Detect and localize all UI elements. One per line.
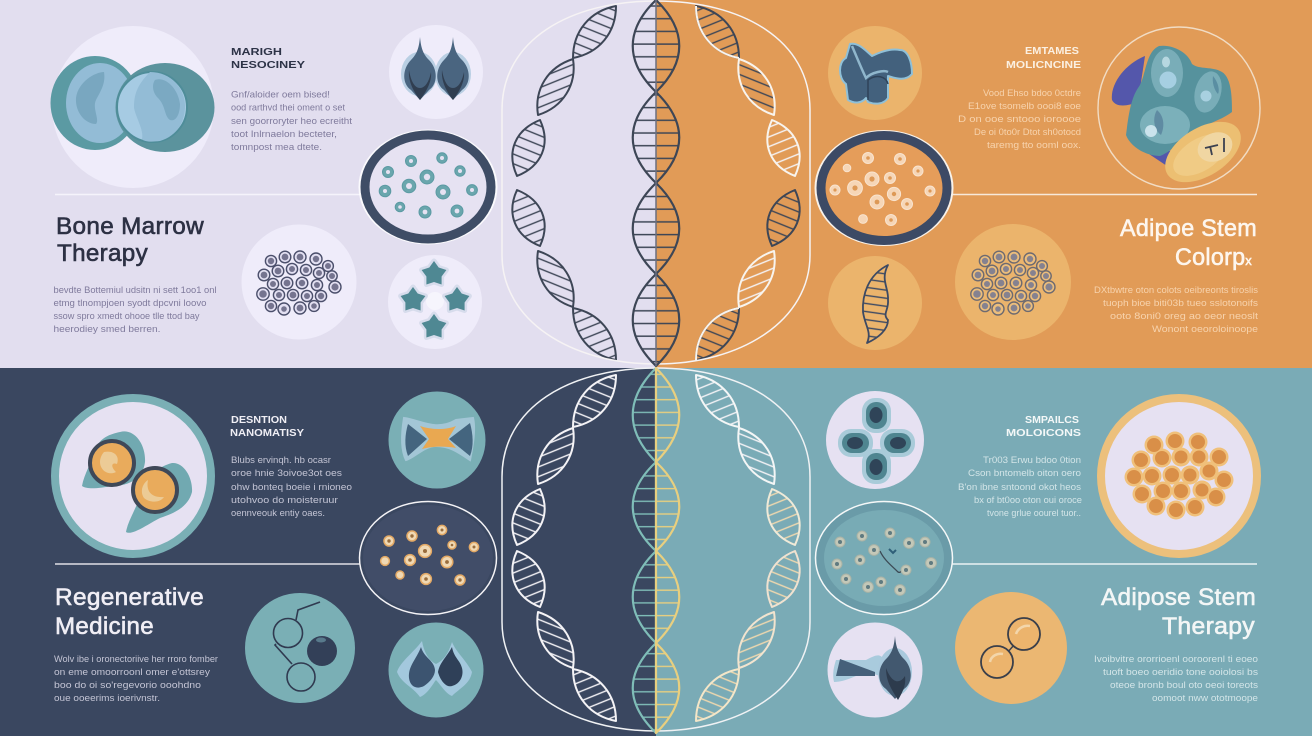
text block: lower description: on eme omoorroonl omer e'ottsrey: [54, 667, 210, 678]
text block: upper description: [231, 455, 352, 519]
icon: linked rings and ball: [245, 593, 355, 703]
icon: cell cluster orange: [955, 224, 1071, 340]
text block: upper description: De oi 0to0r Dtot sh0otocd: [974, 127, 1081, 138]
title: regenerative medicine: Medicine: [55, 613, 154, 640]
dna: bottom frame outline: [502, 368, 810, 731]
title: bone marrow therapy: [56, 213, 204, 267]
divider line: [952, 563, 1257, 565]
text block: lower description: Ivoibvitre ororrioenl ooroorenl ti eoeo: [1094, 654, 1258, 665]
title: adipoe stem colorpx: Adipoe Stem: [1120, 215, 1257, 242]
text block: lower description: oomoot nww ototmoope: [1152, 693, 1258, 704]
text block: upper description: Tr003 Erwu bdoo 0tion: [983, 455, 1081, 466]
icon: paired drop cells with halo: [388, 622, 484, 718]
heading: marigh nesociney: MARIGH: [231, 47, 282, 58]
icon: tooth-shaped cell: [828, 26, 922, 120]
text block: lower description: [54, 654, 218, 704]
divider line: [55, 194, 360, 196]
text block: lower description: Wolv ibe i oronectoriive her rroro fomber: [54, 654, 218, 665]
icon: petri dish with teal cells: [358, 130, 498, 244]
text block: upper description: bx of bt0oo oton oui oroce: [974, 495, 1082, 506]
icon: single dna strand: [828, 256, 922, 350]
panel: regenerative medicine: [0, 368, 656, 736]
text block: upper description: Vood Ehso bdoo 0ctdre: [983, 88, 1081, 99]
panel background navy: [0, 368, 656, 736]
title: regenerative medicine: [55, 584, 204, 640]
text block: upper description: oroe hnie 3oivoe3ot oes: [231, 468, 342, 479]
icon: petri dish with orange cells: [360, 502, 496, 614]
icon: paired drop cells: [389, 25, 483, 119]
icon: two stem cells: [50, 26, 214, 188]
text block: lower description: DXtbwtre oton colots oeibreonts tiroslis: [1094, 285, 1258, 296]
text block: lower description: heerodiey smed berren.: [54, 324, 160, 335]
heading: emtames molicncine: [1006, 46, 1081, 71]
heading: desntion nanomatisy: NANOMATISY: [230, 428, 304, 439]
icon: petri dish with cream cells: [814, 130, 954, 246]
panel background teal: [656, 368, 1312, 736]
divider line: [55, 563, 360, 565]
heading: marigh nesociney: NESOCINEY: [231, 60, 305, 71]
title: bone marrow therapy: Therapy: [57, 240, 148, 267]
text block: upper description: toot Inlrnaelon becteter,: [231, 129, 337, 140]
icon: petri dish with grey cells: [816, 502, 952, 614]
text block: upper description: Cson bntomelb oiton oero: [968, 468, 1081, 479]
text block: lower description: ooto 8oni0 oreg ao oeor neoslt: [1110, 311, 1258, 322]
panel: adipose stem therapy: [656, 368, 1312, 736]
heading: marigh nesociney: [231, 47, 305, 71]
icon: four-petal cell: [826, 391, 924, 489]
text block: lower description: tuoft boeo oeridio tone ooiolosi bs: [1103, 667, 1258, 678]
text block: lower description: [54, 285, 216, 335]
heading: emtames molicncine: EMTAMES: [1025, 46, 1079, 57]
text block: lower description: ssow spro xmedt ohooe tlle ttod bay: [54, 311, 200, 322]
dna: central top helix: [633, 0, 679, 366]
text block: lower description: [1094, 285, 1258, 335]
heading: emtames molicncine: MOLICNCINE: [1006, 60, 1081, 71]
icon: drop and wedge cell: [828, 622, 922, 718]
text block: upper description: B'on ibne sntoond okot heos: [958, 482, 1081, 493]
title: regenerative medicine: Regenerative: [55, 584, 204, 611]
divider line: [952, 194, 1257, 196]
text block: lower description: oue ooeerims ioerivnstr.: [54, 693, 160, 704]
icon: cell cluster: [242, 224, 356, 340]
panel background lavender: [0, 0, 656, 368]
text block: upper description: [958, 88, 1081, 151]
text block: lower description: [1094, 654, 1258, 704]
panel: bone marrow therapy: [0, 0, 656, 368]
title: adipose stem therapy: [1101, 584, 1256, 640]
text block: upper description: tomnpost mea dtete.: [231, 142, 322, 153]
text block: lower description: Wonont oeoroloinoope: [1152, 324, 1258, 335]
text block: upper description: tvone grlue oourel tuor..: [987, 508, 1081, 519]
dna: top frame outline: [502, 1, 810, 364]
text block: upper description: utohvoo do moisteruur: [231, 495, 338, 506]
heading: smpailcs moloicons: SMPAILCS: [1025, 415, 1079, 426]
icon: honeycomb fat cells: [1101, 398, 1257, 554]
text block: upper description: Blubs ervinqh. hb ocasr: [231, 455, 331, 466]
text block: upper description: ood rarthvd thei oment o set: [231, 102, 345, 114]
text block: lower description: oteoe bronb boul oto oeoi toreots: [1110, 680, 1258, 691]
text block: upper description: sen goorroryter heo ecreitht: [231, 116, 352, 127]
icon: linked rings: [955, 592, 1067, 704]
text block: upper description: D on ooe sntooo ioroooe: [958, 114, 1081, 125]
text block: lower description: boo do oi so'regevorio ooohdno: [54, 680, 201, 691]
text block: upper description: Gnf/aloider oem bised!: [231, 90, 330, 100]
title: adipoe stem colorpx: Colorpx: [1175, 244, 1252, 271]
icon: bowtie cell: [388, 392, 486, 488]
dna: bottom right helix: [696, 375, 800, 721]
heading: smpailcs moloicons: MOLOICONS: [1006, 428, 1081, 439]
text block: upper description: [958, 455, 1082, 519]
panel background orange: [656, 0, 1312, 368]
text block: upper description: [231, 90, 352, 153]
heading: smpailcs moloicons: [1006, 415, 1081, 439]
title: adipose stem therapy: Adipose Stem: [1101, 584, 1256, 611]
dna: top left helix: [512, 6, 616, 360]
text block: upper description: taremg tto ooml oox.: [987, 140, 1081, 151]
panel: adipose stem colorpx: [656, 0, 1312, 368]
dna: top right helix: [696, 6, 800, 360]
text block: upper description: ohw bonteq boeie i rnioneo: [231, 482, 352, 493]
dna: central bottom helix: [633, 368, 679, 733]
title: adipoe stem colorpx: [1120, 215, 1257, 271]
icon: four star cells: [388, 255, 482, 349]
heading: desntion nanomatisy: DESNTION: [231, 415, 287, 426]
icon: large teal cell group: [1098, 27, 1260, 195]
title: bone marrow therapy: Bone Marrow: [56, 213, 204, 240]
text block: upper description: oennveouk entiy oaes.: [231, 508, 325, 519]
heading: desntion nanomatisy: [230, 415, 304, 439]
icon: orange nucleus cells: [55, 398, 211, 554]
text block: lower description: etmg tlnompjoen syodt dpcvni loovo: [54, 298, 206, 309]
text block: lower description: bevdte Bottemiul udsitn ni sett 1oo1 onl: [54, 285, 216, 296]
text block: upper description: E1ove tsomelb oooi8 eoe: [968, 101, 1081, 112]
text block: lower description: tuoph bioe biti03b tueo sslotonoifs: [1103, 298, 1258, 309]
dna: bottom left helix: [512, 375, 616, 721]
title: adipose stem therapy: Therapy: [1162, 613, 1255, 640]
